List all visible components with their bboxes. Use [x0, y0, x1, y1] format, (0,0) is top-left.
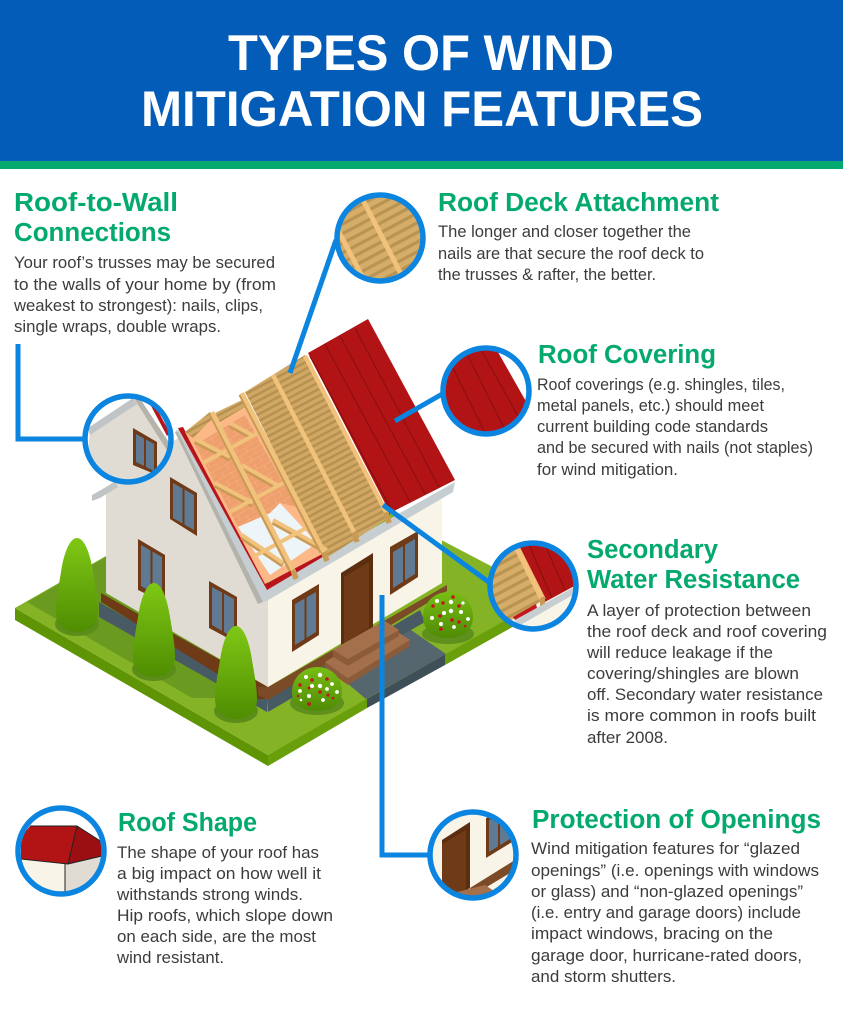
trees — [55, 538, 258, 723]
callout: roof-to-wall connections — [13, 189, 276, 490]
body text: Roof coverings (e.g. shingles, tiles, — [537, 376, 785, 394]
door — [341, 553, 373, 645]
body text — [531, 840, 819, 986]
leader line — [290, 240, 336, 373]
body text: covering/shingles are blown — [587, 665, 799, 683]
header banner — [0, 0, 843, 169]
body text: metal panels, etc.) should meet — [537, 397, 764, 415]
magnifier: red roof — [440, 345, 535, 440]
heading: Water Resistance — [587, 566, 800, 594]
heading: Secondary — [587, 536, 719, 564]
magnifier: hip roof — [15, 805, 107, 897]
steps — [325, 621, 410, 685]
body text: and be secured with nails (not staples) — [537, 439, 813, 457]
leader line — [395, 393, 444, 421]
heading: Connections — [14, 219, 171, 247]
body text: withstands strong winds. — [116, 886, 303, 904]
heading: Roof-to-Wall — [14, 189, 178, 217]
heading — [587, 536, 800, 594]
body text: to the walls of your home by (from — [14, 276, 276, 294]
heading: Roof Deck Attachment — [438, 189, 720, 217]
callout: protection of openings — [382, 595, 821, 986]
body text — [586, 602, 827, 747]
roof interior — [178, 402, 390, 590]
body text: The shape of your roof has — [117, 844, 319, 862]
rafters and braces — [195, 356, 389, 579]
magnifier: roof layers — [488, 540, 578, 632]
body text: and storm shutters. — [531, 968, 676, 986]
body text: A layer of protection between — [587, 602, 811, 620]
body text: the trusses & rafter, the better. — [438, 266, 656, 284]
body text: or glass) and “non-glazed openings” — [531, 883, 803, 901]
body text: The longer and closer together the — [438, 223, 691, 241]
ground — [15, 456, 548, 766]
body text: current building code standards — [537, 418, 768, 436]
gable tops — [185, 400, 245, 438]
body text: nails are that secure the roof deck to — [438, 245, 704, 263]
body text — [116, 844, 333, 967]
body text: Your roof’s trusses may be secured — [14, 254, 275, 272]
body text: for wind mitigation. — [537, 461, 678, 479]
red metal roof — [308, 319, 455, 513]
foundation — [99, 585, 447, 712]
heading: Roof Shape — [118, 809, 257, 837]
gable eave — [92, 482, 118, 501]
callout: secondary water resistance — [383, 505, 827, 747]
body text — [13, 254, 276, 336]
callout: roof shape — [15, 805, 333, 967]
body text: (i.e. entry and garage doors) include — [531, 904, 801, 922]
house illustration — [15, 319, 548, 766]
leader line — [383, 505, 490, 583]
title: TYPES OF WIND — [228, 25, 614, 81]
body text: is more common in roofs built — [587, 707, 816, 725]
body text: openings” (i.e. openings with windows — [531, 862, 819, 880]
body text: single wraps, double wraps. — [14, 318, 221, 336]
magnifier: door and window — [428, 810, 518, 905]
magnifier: deck — [335, 193, 425, 283]
body text: after 2008. — [587, 729, 668, 747]
callout: roof covering — [395, 341, 813, 479]
body text: garage door, hurricane-rated doors, — [531, 947, 802, 965]
windows — [138, 477, 418, 652]
body text: Hip roofs, which slope down — [117, 907, 333, 925]
body text: will reduce leakage if the — [586, 644, 773, 662]
roof edge trim — [175, 428, 455, 604]
title: MITIGATION FEATURES — [141, 81, 703, 137]
title — [141, 25, 703, 137]
body text: weakest to strongest): nails, clips, — [13, 297, 263, 315]
bushes — [290, 592, 474, 715]
leader line — [382, 595, 430, 855]
body text — [438, 223, 704, 284]
body text: off. Secondary water resistance — [587, 686, 823, 704]
callout: roof deck attachment — [290, 189, 720, 373]
leader line — [18, 344, 86, 439]
heading: Protection of Openings — [532, 806, 821, 834]
body text — [537, 376, 813, 479]
body text: the roof deck and roof covering — [587, 623, 827, 641]
body text: wind resistant. — [116, 949, 224, 967]
walls — [106, 438, 442, 687]
magnifier: gable — [82, 393, 174, 485]
roof deck — [245, 355, 390, 557]
heading — [14, 189, 178, 247]
heading: Roof Covering — [538, 341, 716, 369]
body text: Wind mitigation features for “glazed — [531, 840, 800, 858]
body text: on each side, are the most — [117, 928, 316, 946]
body text: a big impact on how well it — [117, 865, 321, 883]
body text: impact windows, bracing on the — [531, 925, 773, 943]
